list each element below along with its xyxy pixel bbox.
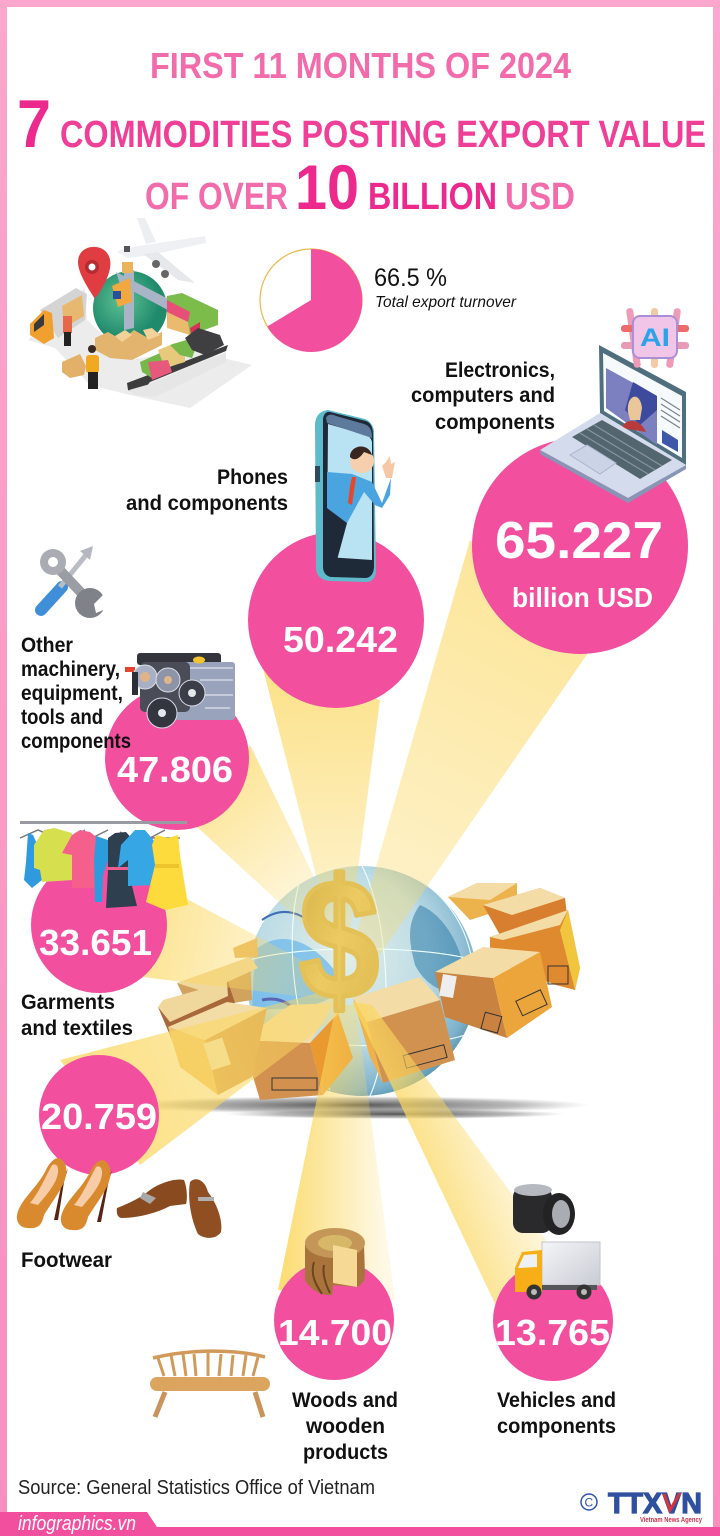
pie label: 66.5 % <box>374 264 447 292</box>
circle: electronics 65.227: 65.227 <box>495 512 663 570</box>
source: Source: General Statistics Office of Vietnam <box>18 1477 375 1499</box>
icon: clothes rack <box>20 821 188 910</box>
circle: electronics 65.227 <box>472 438 688 654</box>
label: vehicles <box>497 1389 616 1438</box>
circle: woods 14.700 <box>274 1260 394 1380</box>
label: vehicles: components <box>497 1415 616 1438</box>
logo: TTXVN: TTXVN <box>608 1488 702 1520</box>
label: electronics: Electronics, <box>445 359 555 382</box>
globe <box>247 866 477 1096</box>
circle: phones 50.242: 50.242 <box>283 619 398 660</box>
label: woods: Woods and <box>292 1389 398 1412</box>
pie chart: 66.5 percent <box>260 249 362 352</box>
label: phones: and components <box>126 492 288 515</box>
label: electronics: computers and <box>411 384 555 407</box>
icon: wrench and screwdriver <box>40 546 108 618</box>
icon: phone with man <box>315 410 395 582</box>
title <box>17 45 706 223</box>
icon: AI chip <box>621 308 689 368</box>
circle: vehicles 13.765: 13.765 <box>495 1312 610 1353</box>
label: phones: Phones <box>217 466 288 489</box>
icon: high heels and loafers <box>17 1158 221 1238</box>
label: machinery: components <box>21 730 131 753</box>
circle: garments 33.651 <box>31 857 167 993</box>
illustration: logistics and shipping <box>28 218 252 408</box>
cardboard boxes <box>158 883 580 1100</box>
label: woods: wooden <box>305 1415 385 1438</box>
logo: TTXVN: Vietnam News Agency <box>640 1515 703 1524</box>
label: machinery: equipment, <box>21 682 123 705</box>
label: woods <box>292 1389 398 1464</box>
footer tab: infographics.vn: infographics.vn <box>18 1513 136 1535</box>
label: vehicles: Vehicles and <box>497 1389 616 1412</box>
label: electronics: components <box>435 411 555 434</box>
icon: laptop <box>540 345 686 503</box>
circle: phones 50.242 <box>248 532 424 708</box>
light rays from globe to circles <box>60 540 590 1310</box>
circle: woods 14.700: 14.700 <box>278 1312 392 1353</box>
title: 7 <box>17 86 51 162</box>
label: footwear: Footwear <box>21 1249 112 1272</box>
label: machinery: tools and <box>21 706 103 729</box>
logo: TTXVN <box>581 1488 703 1524</box>
pie label <box>374 264 517 311</box>
label: machinery: Other <box>21 634 73 657</box>
icon: tires <box>513 1184 575 1235</box>
shadow below globe <box>110 1096 590 1119</box>
circle: machinery 47.806 <box>105 686 249 830</box>
label: garments: and textiles <box>21 1017 133 1040</box>
label: woods: products <box>303 1441 388 1464</box>
circle: vehicles 13.765 <box>493 1261 613 1381</box>
title: USD <box>505 176 575 218</box>
title: BILLION <box>368 176 497 218</box>
circle: electronics 65.227: billion USD <box>512 582 653 613</box>
icon: wooden bench <box>150 1351 270 1417</box>
label: garments <box>21 991 133 1040</box>
pie label: Total export turnover <box>375 294 517 311</box>
dollar sign: $ <box>299 845 379 1035</box>
label: machinery <box>21 634 131 753</box>
circle: garments 33.651: 33.651 <box>39 922 152 963</box>
label: phones <box>126 466 288 515</box>
title: FIRST 11 MONTHS OF 2024 <box>150 45 571 86</box>
title: OF OVER <box>145 176 288 218</box>
label: machinery: machinery, <box>21 658 120 681</box>
icon: tree stump <box>305 1228 365 1295</box>
icon: engine <box>125 653 235 728</box>
label: garments: Garments <box>21 991 115 1014</box>
icon: AI chip: AI <box>640 324 670 352</box>
icon: delivery truck <box>515 1242 600 1300</box>
title: 10 <box>295 153 359 223</box>
circle: footwear 20.759: 20.759 <box>41 1096 157 1137</box>
circle: machinery 47.806: 47.806 <box>117 749 233 790</box>
logo: TTXVN: C <box>584 1496 594 1510</box>
circle: footwear 20.759 <box>39 1055 159 1175</box>
label: electronics <box>411 359 555 434</box>
